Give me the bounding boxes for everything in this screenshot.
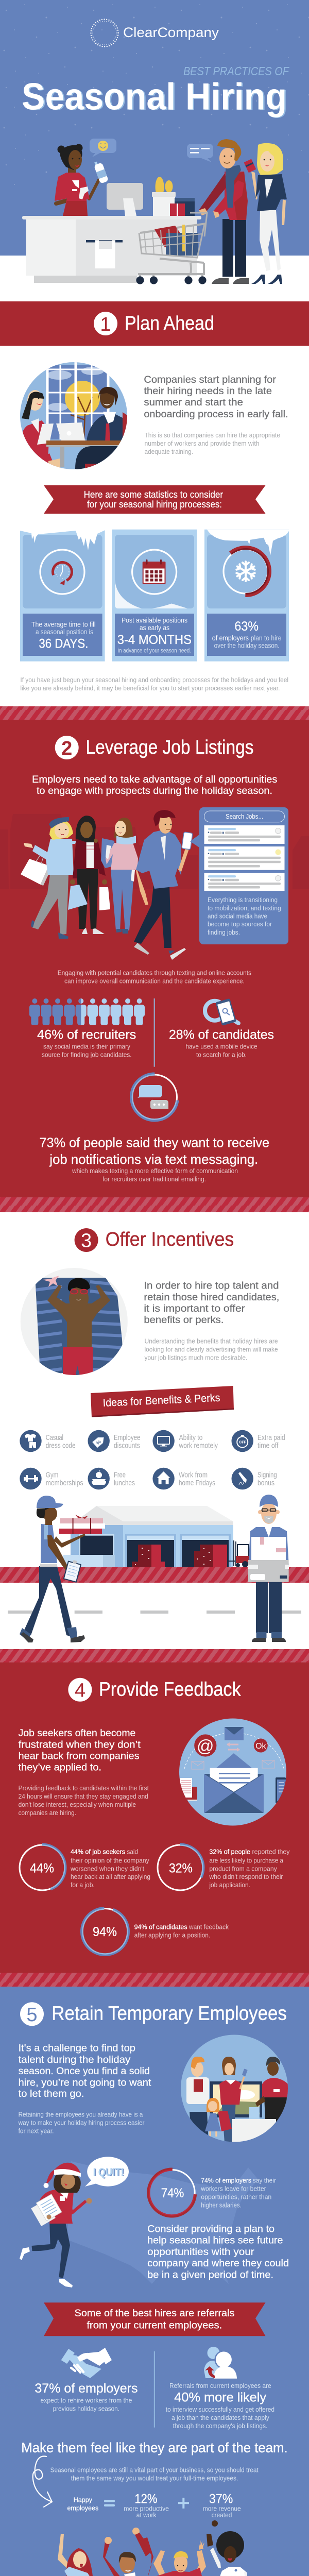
subheading: Employers need to take advantage of all opportunities: [32, 774, 278, 785]
intro text: [144, 1280, 279, 1362]
panel: section 4 provide feedback: [0, 1649, 309, 1987]
intro text: Providing feedback to candidates within the first: [19, 1785, 149, 1792]
stat: 73 percent text messaging: [39, 1135, 269, 1183]
perk: work remotely: [152, 1430, 218, 1452]
equation: happy employees: created: [212, 2511, 232, 2519]
stat text: 94 percent: 94% of candidates: [134, 1923, 187, 1930]
ring chart: 32 percent: [157, 1844, 203, 1891]
logo: [91, 20, 219, 46]
perk: signing bonus: [232, 1468, 277, 1489]
ribbon banner: referrals: from your current employees.: [87, 2319, 222, 2331]
stat: 46 percent recruiters: say social media is their primary: [43, 1043, 131, 1050]
perk: free lunches: Free: [114, 1471, 126, 1479]
stat text: 44 percent: their opinion of the company: [71, 1857, 149, 1864]
stat card: 3-4 months: in advance of your season need.: [118, 648, 191, 654]
logo: ClearCompany: [123, 25, 219, 40]
intro text: Companies start planning for: [144, 374, 277, 385]
stat text: 32 percent: [209, 1848, 290, 1889]
stat text: 44 percent: hear back at all after applying: [71, 1873, 150, 1880]
consider text: Consider providing a plan to: [147, 2224, 274, 2235]
perk: gym memberships: Gym: [46, 1471, 58, 1479]
stat text: 44 percent: said: [127, 1848, 138, 1855]
stat card: 63 percent: over the holiday season.: [214, 642, 280, 650]
perk: casual dress code: Casual: [46, 1434, 63, 1442]
stat card: 63 percent: of employers: [212, 634, 249, 642]
stat: 73 percent text messaging: for recruiters over traditional emailing.: [102, 1176, 206, 1183]
ring chart: 94 percent: [75, 1902, 135, 1961]
perk: employee discounts: Employee: [114, 1434, 140, 1442]
illustration: checkout counter scene: [22, 139, 287, 284]
groceries: [152, 177, 195, 216]
heading: 2: [61, 738, 72, 759]
subheading: to engage with prospects during the holiday season.: [37, 785, 272, 796]
stat: 28 percent candidates: 28% of candidates: [169, 1028, 274, 1042]
arrow: curly: [33, 2456, 52, 2507]
stat text: 44 percent: 44% of job seekers: [71, 1848, 125, 1855]
perk: employee discounts: %: [95, 1439, 102, 1446]
heading: 4: [75, 1680, 85, 1701]
equation: happy employees: at work: [136, 2511, 157, 2519]
stat card: 36 days: The average time to fill: [31, 621, 96, 629]
perk: work from home fridays: [152, 1468, 215, 1489]
panel text: Everything is transitioning: [208, 896, 278, 904]
stat text: 32 percent: job application.: [209, 1882, 250, 1889]
equation: happy employees: more revenue: [203, 2504, 241, 2512]
intro text: summer and start the: [144, 397, 243, 408]
heading: [55, 736, 253, 759]
panel: job search results: [190, 807, 288, 944]
stat text: 74 percent: workers leave for better: [200, 2185, 266, 2193]
heading: Offer Incentives: [106, 1229, 234, 1250]
stat text: 94 percent: [134, 1923, 229, 1939]
jumper: red sweater: [95, 2528, 153, 2576]
stat: 28 percent candidates: [169, 1028, 274, 1059]
icon: referral people: [204, 2347, 237, 2379]
shopper: pink sweater: [101, 818, 138, 934]
shopping cart: [138, 213, 207, 279]
intro text: Job seekers often become: [19, 1727, 135, 1739]
stat text: 74 percent: [200, 2177, 276, 2209]
shopping man: [199, 139, 249, 284]
stat: 73 percent text messaging: 73% of people said they want to receive: [39, 1135, 269, 1150]
intro text: season. Once you find a solid: [19, 2065, 150, 2077]
stat card: 3-4 months: Post available positions: [122, 617, 187, 624]
perk: extra paid time off: Extra paid: [258, 1434, 285, 1442]
stat card: 63 percent: plan to hire: [251, 634, 281, 642]
forklift: [229, 1540, 249, 1567]
intro text: to let them go.: [19, 2088, 84, 2099]
intro text: 24 hours will ensure that they stay engaged and: [19, 1793, 148, 1800]
stat: 37 percent employers: previous holiday season.: [53, 2405, 119, 2412]
stat: 73 percent text messaging: which makes texting a more effective form of communication: [72, 1167, 238, 1175]
perk: work from home fridays: home Fridays: [179, 1479, 215, 1487]
stat: 40 percent more likely: a job than the candidates that apply: [171, 2414, 269, 2421]
ring chart: 73 percent with chat icon: [128, 1071, 181, 1124]
intro text: companies are hiring.: [19, 1809, 76, 1817]
perk: work from home fridays: Work from: [179, 1471, 208, 1479]
intro text: way to make your holiday hiring process easier: [18, 2120, 145, 2127]
illustration: jumping team: [58, 2520, 256, 2576]
panel text: and social media have: [208, 913, 267, 920]
town silhouette: [0, 814, 309, 889]
jumper: plaid shirt: [153, 2550, 206, 2576]
engaging text: can improve overall communication and the candidate experience.: [64, 978, 245, 985]
waving hand: [199, 2540, 204, 2550]
stat text: 74 percent: 74% of employers: [201, 2177, 251, 2184]
delivery man with gifts: [20, 1496, 105, 1642]
subtitle: BEST PRACTICES OF: [183, 64, 290, 78]
team text: [50, 2467, 259, 2482]
speech bubble: message: [187, 144, 213, 162]
stat text: 44 percent: for a job.: [71, 1882, 95, 1889]
panel: section 2 leverage job listings: [0, 706, 309, 1212]
illustration: interview by window: [20, 362, 130, 476]
stat: 37 percent employers: expect to rehire workers from the: [40, 2397, 132, 2404]
stat: 37 percent employers: [35, 2381, 138, 2412]
perk: signing bonus: bonus: [258, 1479, 274, 1487]
intro text: Understanding the benefits that holiday hires are: [144, 1338, 278, 1345]
us map background: [67, 2161, 258, 2284]
shopper: dark hair cardigan: [68, 816, 110, 934]
engaging text: Engaging with potential candidates through texting and online accounts: [58, 970, 251, 977]
ring chart: 32 percent: 32%: [169, 1861, 193, 1875]
job card 3: [204, 873, 284, 891]
consider text: help seasonal hires see future: [147, 2235, 283, 2246]
job card 2: [204, 846, 284, 870]
intro text: onboarding process in early fall.: [144, 409, 288, 420]
stat text: 32 percent: who didn't respond to their: [209, 1873, 283, 1880]
consider text: [147, 2224, 289, 2280]
equation: happy employees: more productive: [124, 2504, 169, 2512]
stat text: 32 percent: are less likely to purchase a: [209, 1857, 283, 1864]
intro text: [18, 2043, 151, 2135]
panel: job search results: Search Jobs...: [226, 812, 263, 820]
perk: work remotely: Ability to: [179, 1434, 202, 1442]
illustration: man on beach towel: [20, 1267, 128, 1376]
engaging text: [58, 970, 251, 985]
icon: calendar: [143, 560, 166, 584]
perk: employee discounts: [88, 1430, 140, 1452]
ribbon banner: statistics: Here are some statistics to consider: [84, 489, 223, 500]
intro text: hear back from companies: [19, 1750, 140, 1761]
perk: extra paid time off: time off: [258, 1442, 279, 1450]
icon: clock: [50, 560, 75, 585]
heading: Retain Temporary Employees: [52, 2003, 287, 2025]
stat text: 32 percent: reported they: [252, 1848, 290, 1855]
ring chart: 74 percent: [147, 2167, 197, 2218]
stripe band and road: [0, 1567, 309, 1614]
stat: 46 percent recruiters: source for finding job candidates.: [42, 1052, 132, 1059]
illustration: email envelope: [178, 1718, 287, 1827]
heading band: [0, 301, 309, 346]
perk: signing bonus: Signing: [258, 1471, 277, 1479]
shopper: man with phone: [134, 810, 193, 960]
stat: 28 percent candidates: have used a mobile device: [185, 1043, 258, 1050]
speech bubble: i quit: I QUIT!: [93, 2166, 124, 2178]
intro text: This is so that companies can hire the appropriate: [144, 432, 280, 439]
stat card: 36 days: a seasonal position is: [36, 628, 93, 636]
intro text: number of workers and provide them with: [144, 440, 260, 447]
icon: ten person pictogram 46 percent: [29, 998, 145, 1025]
intro text: It's a challenge to find top: [19, 2043, 135, 2054]
panel: section 5 retain temporary employees: [0, 1987, 309, 2576]
illustration: warehouse: [63, 1506, 249, 1567]
stat text: 94 percent: after applying for a position.: [134, 1931, 210, 1939]
intro text: retain those hired candidates,: [144, 1292, 279, 1303]
stat text: 32 percent: 32% of people: [209, 1848, 250, 1855]
intro text: it is important to offer: [144, 1303, 245, 1314]
stat card: 36 days: [20, 529, 105, 662]
stat: 40 percent more likely: through the company's job listings.: [173, 2422, 267, 2430]
ring chart: 44 percent: [19, 1844, 65, 1891]
subheading: [32, 774, 278, 796]
equation: happy employees: Happy: [74, 2496, 92, 2504]
stat: 73 percent text messaging: job notifications via text messaging.: [49, 1151, 258, 1167]
intro text: [19, 1727, 149, 1817]
shopper: blonde with bag: [21, 817, 76, 939]
perk: employee discounts: discounts: [114, 1442, 140, 1450]
stat card: 3-4 months: [112, 530, 197, 662]
ring chart: 94 percent: 94%: [93, 1925, 117, 1939]
footnote text: like you are already behind, it may be beneficial for you to start your processes earlier next year.: [20, 685, 280, 692]
shoppers: [21, 810, 193, 960]
monitor: [107, 183, 143, 216]
consider text: company and where they could: [147, 2258, 289, 2269]
icon: snowflake: [236, 562, 255, 581]
intro text: frustrated when they don’t: [19, 1739, 141, 1750]
heading band: Plan Ahead: [125, 313, 214, 334]
heading: Provide Feedback: [99, 1679, 241, 1701]
intro text: benefits or perks.: [144, 1314, 224, 1326]
stat card: 3-4 months: 3-4 MONTHS: [117, 633, 192, 647]
heading band: 1: [100, 314, 111, 335]
intro text: Retaining the employees you already have is a: [19, 2111, 143, 2119]
ring chart: 74 percent: 74%: [161, 2186, 184, 2200]
perk: extra paid time off: [232, 1430, 285, 1452]
stat text: 74 percent: say their: [253, 2177, 276, 2184]
jumper: curly hair: [199, 2520, 256, 2576]
illustration: email envelope: @: [197, 1736, 214, 1755]
team text: them the same way you would treat your full-time employees.: [71, 2475, 238, 2482]
heading: 3: [81, 1230, 92, 1252]
ribbon banner: statistics: [44, 485, 266, 514]
stat text: 74 percent: higher salaries.: [201, 2201, 242, 2209]
stat card: 63 percent: [204, 530, 289, 662]
stat text: 94 percent: want feedback: [188, 1923, 229, 1930]
stat text: 44 percent: [70, 1848, 150, 1889]
footnote text: [20, 676, 288, 692]
stat: 40 percent more likely: 40% more likely: [174, 2391, 267, 2405]
panel: section 1 plan ahead: [0, 301, 309, 692]
intro text: [144, 374, 288, 455]
delivery man with boxes: [248, 1495, 289, 1642]
equation: happy employees: employees: [67, 2504, 99, 2512]
perk: work remotely: work remotely: [179, 1442, 218, 1450]
consider text: opportunities with your: [147, 2246, 254, 2258]
stat card: 36 days: 36 DAYS.: [39, 637, 88, 651]
icon: handshake: [61, 2348, 112, 2378]
title: Seasonal Hiring: [23, 76, 288, 118]
panel text: become top sources for: [208, 921, 272, 928]
stat: 46 percent recruiters: 46% of recruiters: [37, 1028, 136, 1042]
ribbon banner: referrals: Some of the best hires are referrals: [75, 2308, 235, 2319]
illustration: employee in santa hat quitting: [20, 2163, 92, 2287]
subheading: part of the team: Make them feel like they are part of the team.: [21, 2440, 288, 2455]
stat text: 32 percent: product from a company: [209, 1865, 277, 1872]
job card 1: [204, 825, 284, 844]
intro text: their hiring needs in the late: [144, 385, 272, 397]
shopping woman: [244, 143, 287, 284]
speech bubble: i quit: I QUIT!: [94, 2167, 125, 2179]
perk: casual dress code: [20, 1430, 76, 1452]
panel text: to mobilization, and texting: [208, 905, 281, 912]
consider text: be in a given period of time.: [147, 2269, 273, 2280]
perk: free lunches: lunches: [114, 1479, 135, 1487]
stat: 37 percent employers: 37% of employers: [35, 2381, 138, 2396]
heading: [68, 1678, 241, 1702]
heading: 5: [26, 2004, 38, 2026]
title: Seasonal Hiring: [22, 76, 287, 117]
stat text: 44 percent: worsened when they didn't: [70, 1865, 145, 1872]
ring chart: 44 percent: 44%: [30, 1861, 54, 1875]
equation: happy employees: 37%: [209, 2492, 233, 2506]
panel text: [208, 896, 281, 936]
jumper: red hair: [58, 2534, 118, 2576]
tilted banner: ideas for benefits and perks: Ideas for Benefits & Perks: [102, 1392, 220, 1409]
tilted banner: ideas for benefits and perks: [91, 1386, 234, 1417]
intro text: looking for and clearly advertising them will make: [144, 1346, 278, 1353]
equation: happy employees: 12%: [134, 2492, 157, 2506]
intro text: for next year.: [19, 2128, 54, 2135]
heading: Leverage Job Listings: [85, 737, 253, 758]
perk: casual dress code: dress code: [46, 1442, 76, 1450]
panel: section 3 offer incentives: [0, 1228, 309, 1642]
stat: 40 percent more likely: to interview successfully and get offered: [166, 2406, 274, 2413]
speech bubble: smiley: [90, 139, 116, 157]
footnote text: If you have just begun your seasonal hiring and onboarding processes for the holidays and you feel: [20, 676, 288, 684]
stat text: 74 percent: opportunities, rather than: [201, 2193, 271, 2200]
illustration: email envelope: Ok: [255, 1742, 267, 1751]
intro text: adequate training.: [144, 448, 193, 455]
stat: 46 percent recruiters: [37, 1028, 136, 1059]
perk: extra paid time off: OFF: [239, 1440, 246, 1445]
stat card: 3-4 months: as early as: [140, 624, 169, 632]
stat: 40 percent more likely: Referrals from current employees are: [169, 2382, 271, 2389]
intro text: they’ve applied to.: [19, 1762, 101, 1773]
cashier: [55, 144, 109, 216]
speech bubble: i quit: [85, 2157, 129, 2187]
stat card: 63 percent: 63%: [234, 619, 259, 634]
panel text: finding jobs.: [208, 929, 240, 936]
perk: free lunches: [88, 1468, 135, 1489]
intro text: don't lose interest, especially when multiple: [19, 1801, 136, 1808]
ribbon banner: statistics: for your seasonal hiring processes:: [87, 499, 222, 510]
team text: Seasonal employees are still a vital part of your business, so you should treat: [50, 2467, 259, 2474]
intro text: hire, you’re not going to want: [19, 2077, 151, 2088]
equation: happy employees: [67, 2492, 241, 2519]
counter: [22, 216, 201, 283]
icon: magnifier and phone: [205, 998, 238, 1026]
panel: header: [0, 0, 309, 284]
perk: gym memberships: memberships: [46, 1479, 83, 1487]
intro text: your job listings much more desirable.: [144, 1354, 247, 1362]
box stacks: [132, 1545, 227, 1567]
intro text: In order to hire top talent and: [144, 1280, 279, 1292]
stat: 40 percent more likely: [166, 2382, 274, 2430]
illustration: store employees: [180, 2035, 288, 2143]
perk: gym memberships: [20, 1468, 83, 1489]
stat: 28 percent candidates: to search for a job.: [196, 1052, 247, 1059]
ribbon banner: referrals: [44, 2302, 266, 2336]
intro text: talent during the holiday: [19, 2054, 131, 2065]
